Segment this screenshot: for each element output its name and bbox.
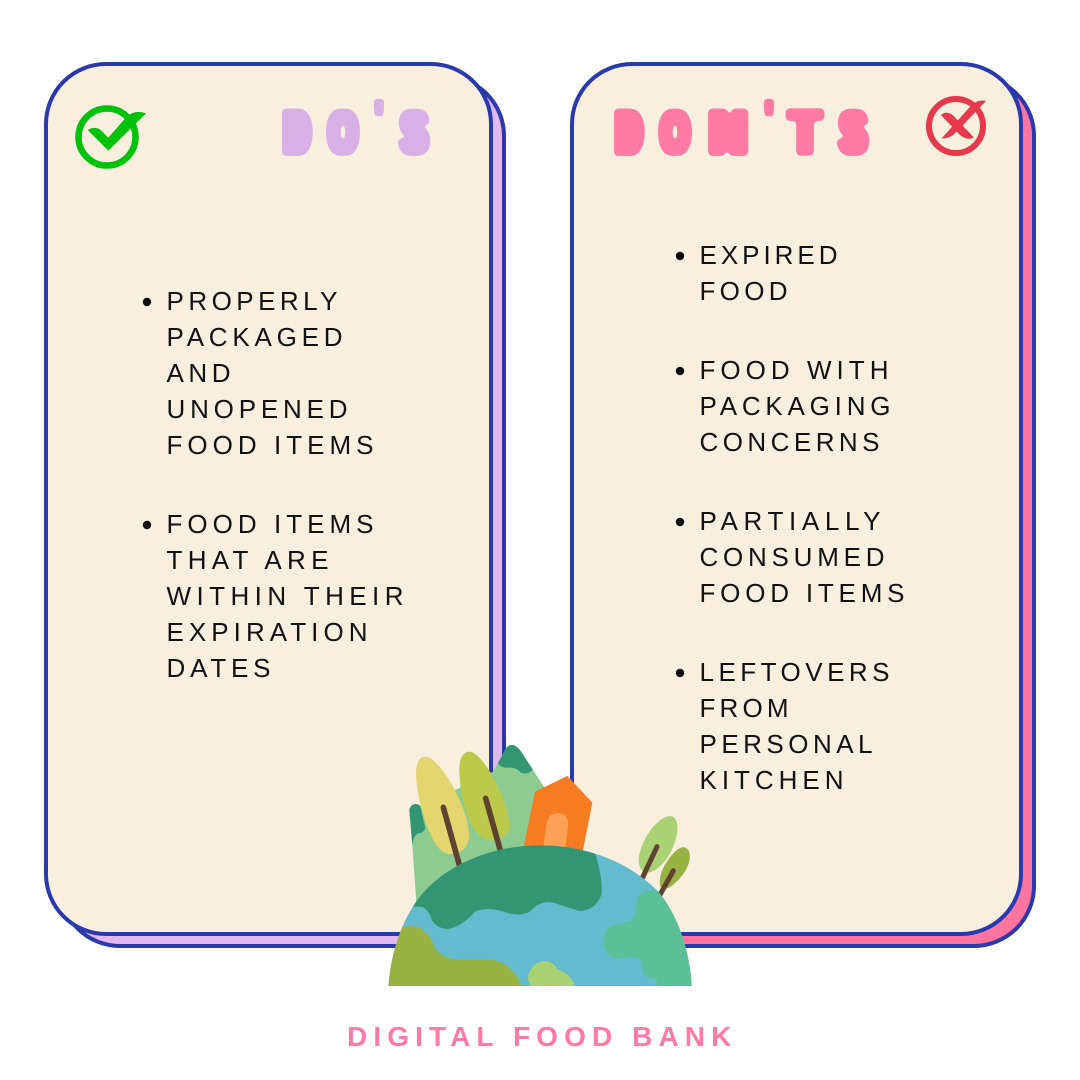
- pink back card: [586, 76, 1034, 946]
- list: don'ts items: KITCHEN: [700, 765, 848, 795]
- cream front card: [572, 64, 1021, 934]
- icon: red cross: [929, 99, 986, 153]
- globe: [388, 845, 692, 986]
- list: do's items: PROPERLY: [166, 286, 342, 316]
- icon: green check: [78, 108, 146, 166]
- heading: don'ts: D: [616, 100, 642, 166]
- list: don'ts items: PARTIALLY: [700, 506, 886, 536]
- heading: do's: ': [374, 91, 384, 148]
- list: do's items: [143, 286, 409, 683]
- list: don'ts items: FROM: [700, 693, 794, 723]
- cream front card: [46, 64, 491, 934]
- heading: don'ts: [616, 91, 866, 166]
- heading: do's: S: [401, 99, 427, 166]
- list: do's items: DATES: [166, 653, 276, 683]
- heading: do's: O: [329, 100, 357, 166]
- list: don'ts items: FOOD: [700, 276, 792, 306]
- heading: do's: D: [284, 100, 310, 166]
- list: do's items: FOOD ITEMS: [166, 430, 378, 460]
- heading: don'ts: N: [710, 99, 746, 166]
- house: [523, 776, 592, 852]
- list: don'ts items: LEFTOVERS: [700, 657, 894, 687]
- heading: don'ts: T: [790, 99, 820, 166]
- list: do's items: THAT ARE: [166, 545, 334, 575]
- list: do's items: WITHIN THEIR: [166, 581, 408, 611]
- list: don'ts items: FOOD WITH: [700, 355, 894, 385]
- panel: do's: [46, 64, 504, 946]
- list: do's items: FOOD ITEMS: [166, 509, 378, 539]
- list: don'ts items: EXPIRED: [700, 240, 842, 270]
- list: don'ts items: PACKAGING: [700, 391, 896, 421]
- footer title: DIGITAL FOOD BANK: [347, 1021, 737, 1052]
- list: don'ts items: PERSONAL: [700, 729, 878, 759]
- heading: don'ts: ': [764, 91, 774, 148]
- panel: don'ts: [572, 64, 1034, 946]
- trees: [416, 752, 690, 898]
- list: do's items: UNOPENED: [166, 394, 352, 424]
- heading: don'ts: O: [661, 100, 689, 166]
- list: don'ts items: [676, 240, 910, 795]
- list: don'ts items: CONCERNS: [700, 427, 884, 457]
- heading: do's: [284, 91, 427, 166]
- heading: don'ts: S: [840, 99, 866, 166]
- list: don'ts items: FOOD ITEMS: [700, 578, 910, 608]
- mountains: [409, 745, 547, 907]
- illustration: globe with trees and house: [380, 745, 713, 987]
- list: do's items: EXPIRATION: [166, 617, 372, 647]
- list: do's items: AND: [166, 358, 236, 388]
- list: do's items: PACKAGED: [166, 322, 348, 352]
- list: don'ts items: CONSUMED: [700, 542, 890, 572]
- lilac back card: [60, 76, 504, 946]
